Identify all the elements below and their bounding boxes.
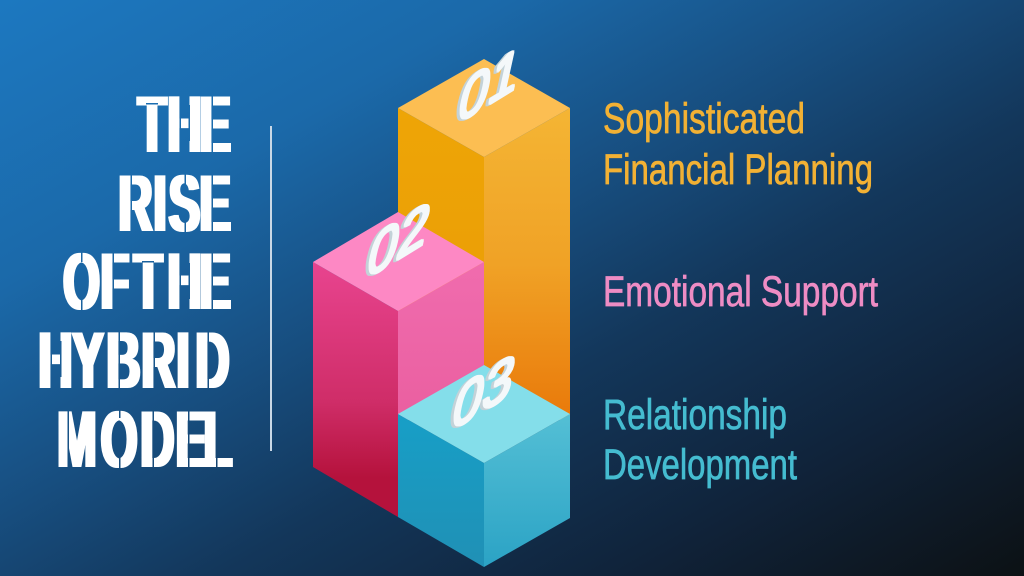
column 01: orange [398,59,570,420]
number 01: 01 [452,30,528,139]
title: THE [138,80,231,170]
label: emotional support: Emotional Support [603,268,878,316]
label: relationship development: Development [603,441,797,489]
number 03: 03 [446,337,522,446]
label: relationship development: Relationship [603,391,787,439]
title: MODEL [57,395,232,485]
title: RISE [118,159,231,249]
column 03: cyan [398,365,570,567]
label: sophisticated financial planning: Financial Planning [603,146,873,194]
vertical divider [270,126,272,451]
column 02: pink [313,212,484,517]
label: sophisticated financial planning: Sophisticated [603,95,805,143]
title: HYBRID [39,316,229,406]
title: OF THE [63,237,231,327]
title [39,80,232,485]
label: relationship development [603,391,797,489]
number 02: 02 [361,185,437,294]
label: sophisticated financial planning [603,95,873,194]
